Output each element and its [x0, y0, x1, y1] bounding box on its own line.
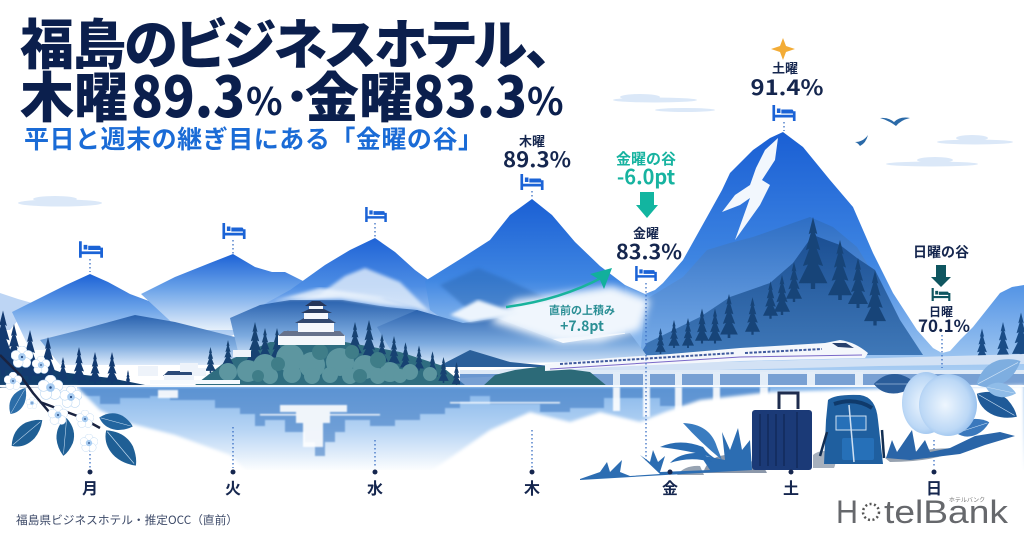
axis day labels: 水 [367, 475, 383, 499]
icon: birds [855, 118, 910, 146]
town buildings [138, 350, 251, 384]
bed icon: friday [635, 266, 657, 281]
axis day labels: 日 [926, 475, 942, 499]
bed icon: thursday [520, 174, 544, 190]
bed icon: sunday [932, 288, 950, 301]
clouds [18, 94, 1013, 206]
green castle hill [195, 320, 465, 386]
arrow: sunday down [931, 265, 951, 287]
title: % [527, 71, 564, 126]
mid ridge in front of saturday peak [640, 217, 910, 360]
logo: HotelBank: telBank [884, 494, 1009, 530]
axis day labels: 土 [783, 475, 799, 499]
title: 金曜 [305, 54, 413, 133]
left shore trees [0, 310, 150, 388]
label: thursday: 89.3% [503, 144, 571, 174]
peach with leaves [874, 351, 1024, 440]
source note: 福島県ビジネスホテル・推定OCC（直前） [16, 512, 238, 528]
mountain range: saturday peak [625, 132, 1024, 372]
cherry branch with flowers [0, 346, 144, 472]
axis day labels: 金 [662, 475, 678, 499]
bed icon: saturday [772, 105, 796, 121]
label: friday valley callout [616, 148, 676, 190]
foreground ridges [40, 286, 650, 367]
label: sunday: 日曜 [929, 303, 953, 320]
logo: HotelBank [836, 494, 1009, 530]
bed icon: tuesday [222, 223, 246, 239]
label: saturday [750, 58, 824, 102]
axis day labels: 木 [524, 475, 540, 499]
backpack [820, 395, 884, 464]
label: rise amount: 直前の上積み [549, 302, 615, 318]
axis day labels [82, 475, 942, 499]
arrow: rise to friday [506, 268, 612, 307]
label: sunday: 70.1% [918, 312, 970, 337]
dashed lines [90, 122, 942, 468]
label: saturday: 91.4% [750, 72, 824, 102]
title: % [246, 71, 283, 126]
foreground grass and rocks [580, 423, 1015, 480]
label: friday [616, 223, 682, 265]
label: friday valley callout: 金曜の谷 [616, 148, 676, 169]
label: saturday: 土曜 [772, 58, 798, 77]
mountain range: far left and monday [0, 274, 240, 350]
castle [278, 301, 345, 345]
axis day labels: 月 [82, 475, 98, 499]
label: rise amount: +7.8pt [560, 316, 604, 336]
title: 福島のビジネスホテル、 [20, 1, 552, 80]
mountain range: wednesday [250, 238, 500, 335]
title [20, 1, 564, 134]
lake [0, 385, 1024, 482]
subtitle: 平日と週末の継ぎ目にある「金曜の谷」 [24, 120, 483, 156]
suitcase [752, 393, 812, 470]
label: friday: 83.3% [616, 236, 682, 265]
arrow: friday down [636, 192, 658, 218]
axis day labels: 火 [225, 475, 241, 499]
label: sunday valley: 日曜の谷 [913, 242, 969, 262]
mountain range: tuesday [141, 254, 345, 330]
bed icon: monday [79, 241, 103, 258]
label: rise amount [549, 302, 615, 336]
logo: HotelBank: ホテルバンク [949, 495, 985, 504]
title: 83.3 [413, 53, 527, 134]
icon: star [771, 38, 795, 60]
shinkansen train [545, 340, 868, 371]
bed icon: wednesday [365, 207, 387, 222]
mountain range: thursday [425, 199, 660, 345]
forest hill [640, 217, 923, 355]
title: ・ [277, 65, 317, 123]
title: 木曜 [20, 54, 128, 133]
label: friday: 金曜 [633, 223, 659, 242]
viaduct and lakeshore right [460, 354, 1024, 387]
logo: HotelBank: H [836, 494, 858, 530]
label: friday valley callout: -6.0pt [617, 161, 676, 190]
label: thursday: 木曜 [519, 131, 545, 150]
label: thursday [503, 131, 571, 174]
right edge trees [975, 312, 1024, 364]
axis dots [88, 470, 936, 474]
title: 89.3 [131, 53, 245, 134]
